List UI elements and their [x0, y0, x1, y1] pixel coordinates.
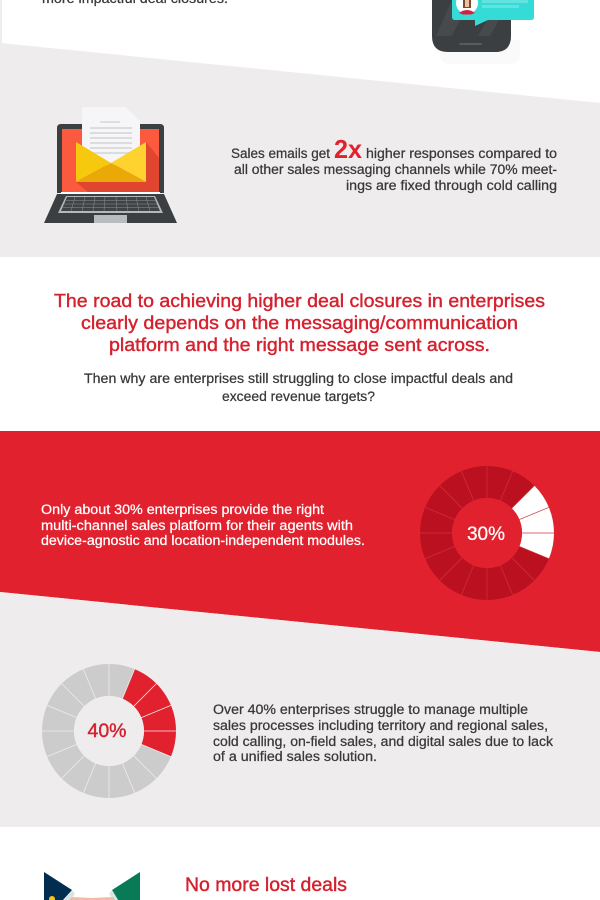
icon: handshake — [44, 872, 140, 900]
chart: 30% donut: 30% — [467, 523, 505, 545]
chart: 40% donut — [42, 664, 176, 798]
text block: struggling question: Then why are enterprises still struggling to close impactful deals and — [84, 371, 513, 386]
text block: 30% statistic: Only about 30% enterprises provide the right — [41, 502, 324, 517]
text block: 30% statistic — [41, 502, 365, 548]
text block: sales emails statistic: Sales emails get — [231, 146, 330, 161]
text block: struggling question: exceed revenue targets? — [222, 389, 375, 404]
text block: 40% statistic: of a unified sales solution. — [213, 749, 377, 764]
text block: 40% statistic: cold calling, on-field sales, and digital sales due to lack — [213, 734, 553, 749]
text block: 30% statistic: device-agnostic and location-independent modules. — [41, 533, 365, 548]
text block: sales emails statistic: all other sales messaging channels while 70% meet- — [234, 162, 557, 177]
text block: sales emails statistic — [231, 134, 557, 193]
text block: 40% statistic — [213, 702, 553, 764]
icon: smartphone with chat bubble — [432, 0, 534, 64]
text block: 30% statistic: multi-channel sales platform for their agents with — [41, 518, 353, 533]
text block: struggling question — [84, 371, 513, 404]
heading: road to higher deal closures: clearly depends on the messaging/communication — [81, 312, 518, 333]
heading: road to higher deal closures: platform and the right message sent across. — [109, 334, 490, 355]
heading: no more lost deals: No more lost deals — [185, 875, 347, 896]
heading: road to higher deal closures — [54, 290, 545, 355]
text block: 40% statistic: Over 40% enterprises struggle to manage multiple — [213, 702, 528, 717]
chart: 40% donut: 40% — [88, 720, 126, 742]
panel: 40% statistic background — [0, 592, 600, 827]
panel: 30% statistic background — [0, 431, 600, 652]
heading: road to higher deal closures: The road to achieving higher deal closures in enterprises — [54, 290, 545, 311]
text block: sales emails statistic: 2x — [334, 134, 363, 164]
chart: 30% donut — [420, 466, 554, 600]
text block: sales emails statistic: higher responses compared to — [366, 146, 557, 161]
text block: sales emails statistic: ings are fixed through cold calling — [346, 178, 557, 193]
panel: email statistic background — [0, 43, 600, 257]
icon: laptop with envelope — [44, 107, 177, 223]
text block: 40% statistic: sales processes including territory and regional sales, — [213, 718, 548, 733]
